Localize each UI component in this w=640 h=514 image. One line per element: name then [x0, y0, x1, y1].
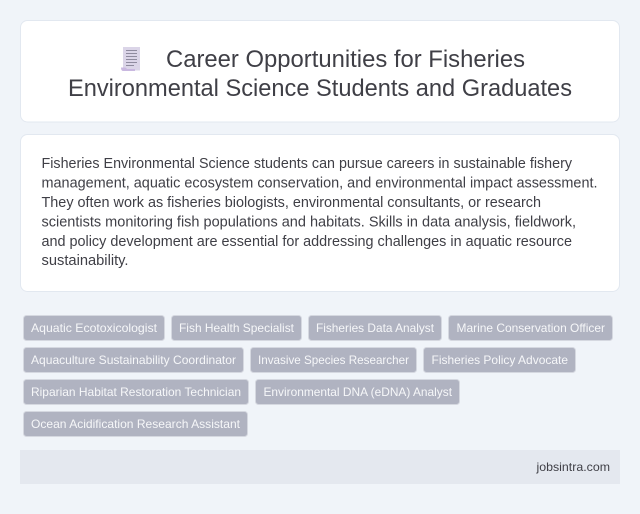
tag: Invasive Species Researcher: Invasive Species Researcher: [258, 353, 409, 367]
tag: Fish Health Specialist: [172, 316, 302, 340]
footer source text: jobsintra.com: [535, 460, 610, 474]
tag: Riparian Habitat Restoration Technician: Riparian Habitat Restoration Technician: [31, 385, 241, 399]
description text: [42, 156, 598, 269]
tag: Invasive Species Researcher: [250, 348, 416, 372]
tag: Riparian Habitat Restoration Technician: [24, 380, 248, 404]
tag: Fisheries Data Analyst: Fisheries Data Analyst: [316, 321, 435, 335]
heading: [68, 46, 572, 102]
tag: Ocean Acidification Research Assistant: Ocean Acidification Research Assistant: [31, 417, 241, 431]
description text: scientists monitoring fish populations and habitats. Skills in data analysis, fieldwork,: [42, 214, 576, 230]
career tags: [24, 316, 612, 436]
tag: Fish Health Specialist: Fish Health Specialist: [179, 321, 295, 335]
description text: They often work as fisheries biologists, environmental consultants, or research: [42, 195, 541, 211]
tag: Aquatic Ecotoxicologist: Aquatic Ecotoxicologist: [31, 321, 158, 335]
tag: Environmental DNA (eDNA) Analyst: [256, 380, 460, 404]
description text: management, aquatic ecosystem conservation, and environmental impact assessment.: [42, 176, 598, 192]
tag: Aquatic Ecotoxicologist: [24, 316, 164, 340]
footer bar: [20, 450, 620, 484]
tag: Fisheries Policy Advocate: [424, 348, 576, 372]
icon: scroll: [121, 47, 140, 71]
heading: Career Opportunities for Fisheries: [166, 46, 525, 73]
panel: description: [20, 134, 620, 292]
tag: Environmental DNA (eDNA) Analyst: Environmental DNA (eDNA) Analyst: [264, 385, 453, 399]
description text: sustainability.: [42, 253, 128, 269]
tag: Fisheries Policy Advocate: Fisheries Policy Advocate: [432, 353, 568, 367]
tag: Marine Conservation Officer: Marine Conservation Officer: [456, 321, 605, 335]
heading: Environmental Science Students and Graduates: [68, 75, 572, 102]
tag: Aquaculture Sustainability Coordinator: [24, 348, 244, 372]
tag: Fisheries Data Analyst: [308, 316, 442, 340]
description text: Fisheries Environmental Science students can pursue careers in sustainable fishery: [42, 156, 573, 172]
tag: Aquaculture Sustainability Coordinator: Aquaculture Sustainability Coordinator: [31, 353, 236, 367]
panel: title card: [20, 20, 620, 122]
description text: and policy development are essential for addressing challenges in aquatic resource: [42, 234, 572, 250]
tag: Marine Conservation Officer: [448, 316, 612, 340]
tag: Ocean Acidification Research Assistant: [24, 412, 248, 436]
